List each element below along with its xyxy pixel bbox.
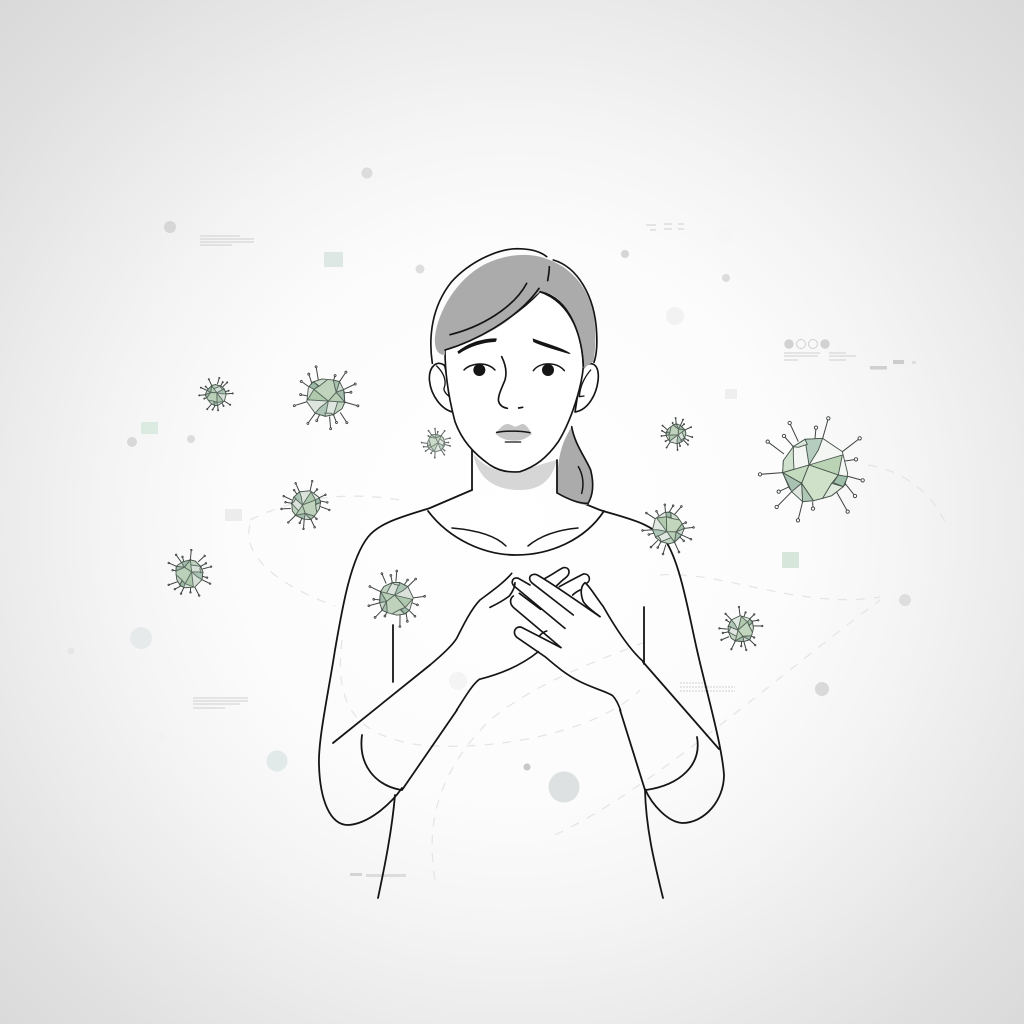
hair outline <box>431 249 597 367</box>
dashed connector paths <box>249 465 945 880</box>
virus: upper left large <box>287 358 369 439</box>
virus: near face <box>417 422 457 462</box>
nose <box>498 357 523 408</box>
torso and shoulders outline <box>319 490 724 898</box>
virus: on chest <box>357 560 432 636</box>
hands <box>430 568 643 711</box>
faint data marks top centre <box>646 224 684 230</box>
background dots <box>68 168 911 802</box>
head <box>429 249 598 472</box>
eyes <box>464 364 564 376</box>
left hand <box>430 573 512 665</box>
back fingers <box>545 568 569 586</box>
virus: large right <box>758 417 864 522</box>
figure: body <box>319 249 724 898</box>
virus: far left top <box>195 372 237 415</box>
virus: lower left <box>163 546 216 599</box>
face <box>445 292 583 472</box>
mouth <box>495 424 532 442</box>
eyebrows <box>457 338 571 354</box>
ponytail <box>557 427 593 505</box>
virus: left middle <box>271 472 338 539</box>
legend of dots and dashes <box>784 339 916 370</box>
virus: right of face <box>657 414 697 454</box>
faint data marks top left <box>200 236 254 245</box>
ears <box>429 363 598 412</box>
hair <box>435 255 595 368</box>
faint data marks bottom <box>350 873 406 877</box>
neck lines <box>472 450 557 493</box>
virus: right shoulder <box>636 497 701 562</box>
right hand fingers <box>530 574 600 617</box>
faint data marks lower right <box>680 683 735 691</box>
faint data marks lower left <box>193 698 248 708</box>
pale squares <box>141 252 799 568</box>
virus: lower right <box>711 601 769 659</box>
neck shadow <box>473 454 557 490</box>
